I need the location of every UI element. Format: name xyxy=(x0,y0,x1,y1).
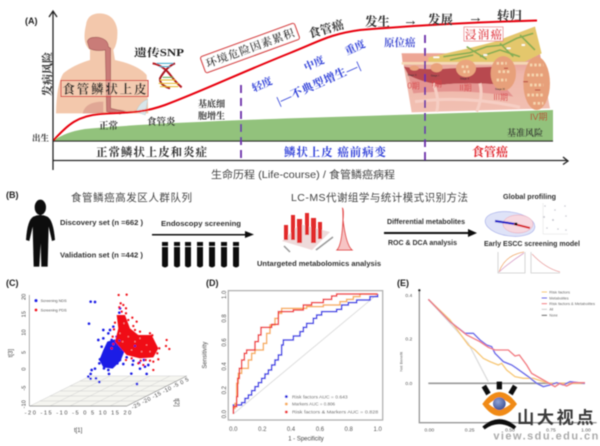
heading: high-incidence cohort: 食管鳞癌高发区人群队列 xyxy=(71,191,192,204)
life-course axis arrow xyxy=(53,157,568,164)
tiny stage captions: Stage II xyxy=(460,76,469,80)
curve: risk factors xyxy=(428,299,585,383)
x axis ticks: 0.0 xyxy=(229,427,238,433)
global profiling label: Global profiling xyxy=(503,192,556,201)
x axis ticks: 0.8 xyxy=(344,427,353,433)
arrow: analysis xyxy=(384,229,477,237)
x axis ticks: 0.25 xyxy=(465,427,475,433)
discovery set label: Discovery set (n =662 ) xyxy=(60,218,144,227)
band: normal squamous epithelium and inflammation: 正常鳞状上皮和炎症 xyxy=(96,145,208,159)
y axis ticks: 15 xyxy=(21,311,27,317)
panel C: 3D scatter plot xyxy=(6,278,190,434)
chart: small scatter grid xyxy=(543,203,568,234)
header: esophageal cancer: 食管癌 xyxy=(307,17,345,41)
stage label: basal cell hyperplasia: 基底细 xyxy=(198,98,225,109)
legend: Screening PDS xyxy=(41,308,67,312)
x axis ticks: 0.4 xyxy=(287,427,296,433)
tiny stage captions: Stage 0 xyxy=(407,73,417,77)
header: occurrence development outcome xyxy=(365,8,522,29)
chart: 3D metabolomics peaks xyxy=(282,208,352,252)
panel B label: (B) xyxy=(6,190,18,200)
y axis ticks: 0 xyxy=(21,368,27,371)
genetic SNP label: 遗传SNP xyxy=(134,46,185,59)
stage label: basal cell hyperplasia xyxy=(198,98,225,121)
illustration: esophageal tumour tissue stages xyxy=(402,27,550,112)
label box: esophageal squamous epithelium: 食管鳞状上皮 xyxy=(62,82,147,96)
ROC curve: markers xyxy=(233,294,378,414)
y axis ticks: -10 xyxy=(21,400,27,408)
logo: lower black arc xyxy=(482,419,516,429)
band: precancerous lesions: 鳞状上皮 癌前病变 xyxy=(284,145,386,159)
curve: risk factors and metabolites xyxy=(428,299,585,387)
y axis arrow xyxy=(49,11,57,170)
icon: DNA helix xyxy=(153,63,182,88)
header: occurrence development outcome: 发生 xyxy=(365,14,391,29)
y axis ticks: 10 xyxy=(21,329,27,336)
endoscopy screening label: Endoscopy screening xyxy=(161,219,241,228)
icon: person silhouette xyxy=(26,200,55,267)
early ESCC model caption: Early ESCC screening model xyxy=(484,239,580,248)
legend: None xyxy=(549,314,558,318)
y axis ticks xyxy=(405,293,412,387)
legend xyxy=(285,394,379,415)
x axis ticks: 1.00 xyxy=(581,427,591,433)
green baseline risk area xyxy=(53,110,553,141)
legend: All xyxy=(549,308,553,312)
label: invasive cancer: 浸润癌 xyxy=(465,28,502,42)
panel E: decision curves xyxy=(397,278,597,440)
label: atypical hyperplasia: |—不典型增生—| xyxy=(275,58,362,108)
3D floor grid xyxy=(30,376,187,406)
validation set label: Validation set (n =442 ) xyxy=(60,250,144,260)
y axis ticks: 0.0 xyxy=(405,381,412,387)
y axis title: t[3] xyxy=(8,349,14,357)
x axis ticks: 0.50 xyxy=(505,427,515,433)
heading: LC-MS metabolomics: LC-MS代谢组学与统计模式识别方法 xyxy=(291,191,468,204)
watermark name: 山大视点 xyxy=(517,407,594,427)
ROC curve: risk factors and markers xyxy=(233,294,378,414)
depth axis ticks: -25 -20 -15 -10 -5 0 5 xyxy=(131,377,190,411)
header: occurrence development outcome: → xyxy=(403,12,418,29)
curve: metabolites xyxy=(428,299,585,387)
differential metabolites label: Differential metabolites xyxy=(387,217,465,226)
scatter: blue screening NDD points xyxy=(88,302,148,384)
baseline axis xyxy=(53,140,553,142)
panel A label: (A) xyxy=(25,16,38,26)
x axis ticks xyxy=(229,427,382,433)
purple dashed divider: left xyxy=(240,85,242,161)
x axis ticks: 0.00 xyxy=(424,427,434,433)
label: baseline risk: 基准风险 xyxy=(507,127,543,138)
y axis ticks: -5 xyxy=(21,386,27,391)
plot frame xyxy=(228,291,383,420)
y axis ticks: 0.8 xyxy=(222,314,228,323)
legend: Screening NDS xyxy=(41,299,67,303)
x axis title smear xyxy=(495,436,597,444)
depth axis title: t[2] xyxy=(173,398,179,407)
panel C label: (C) xyxy=(6,278,18,288)
legend: Risk factors xyxy=(549,290,570,294)
axes xyxy=(29,295,187,406)
x axis ticks: 1.0 xyxy=(373,427,382,433)
band: esophageal cancer: 食管癌 xyxy=(472,144,508,159)
y axis title: Sensitivity xyxy=(202,342,208,369)
header: occurrence development outcome: 转归 xyxy=(497,8,522,23)
tiny stage captions xyxy=(407,73,505,91)
label box: environmental risk factors: 环境危险因素累积 xyxy=(204,25,297,70)
birth label: 出生 xyxy=(32,133,50,143)
chart: PCA ellipse plot xyxy=(484,209,536,239)
tiny stage captions: Stage I xyxy=(431,74,439,78)
y axis ticks: 0.2 xyxy=(222,385,228,394)
panel D: ROC curves xyxy=(202,278,383,443)
watermark logo: 山大视点 xyxy=(482,382,599,442)
y axis ticks: 0.4 xyxy=(405,293,412,299)
purple dashed divider: right xyxy=(424,35,426,161)
ROC curve: risk factors xyxy=(233,294,378,414)
y axis ticks xyxy=(21,294,27,408)
stage labels on tissue: II期 xyxy=(459,83,472,92)
curve: none reference xyxy=(428,381,585,386)
stage label: esophagitis: 食管炎 xyxy=(147,116,177,128)
axes xyxy=(419,290,597,423)
legend: Markers AUC = 0.806 xyxy=(292,402,336,407)
y axis ticks: 0.4 xyxy=(222,362,228,371)
y axis ticks: 0.2 xyxy=(405,336,412,342)
x axis title: t[1] xyxy=(74,428,83,434)
panel E label: (E) xyxy=(397,278,409,288)
x axis ticks: -20 -15 -10 -5 0 5 10 15 20 xyxy=(25,411,131,417)
y axis ticks: 5 xyxy=(21,351,27,354)
red risk curve xyxy=(53,20,537,141)
legend xyxy=(34,299,67,312)
chart: small ROC and DCA thumbnails xyxy=(498,252,560,273)
x axis ticks xyxy=(424,427,591,433)
legend: Risk factors AUC = 0.643 xyxy=(292,394,348,399)
y axis ticks xyxy=(222,290,228,418)
stage labels on tissue: 0期 xyxy=(407,81,420,90)
header: occurrence development outcome: → xyxy=(468,9,483,26)
x axis title: 生命历程 (Life-course) / 食管鳞癌病程 xyxy=(211,168,396,181)
header: occurrence development outcome: 发展 xyxy=(428,12,454,27)
x axis ticks: 0.2 xyxy=(258,427,267,433)
logo: eye pupil xyxy=(493,397,506,410)
y axis ticks: 20 xyxy=(21,294,27,300)
watermark URL: view.sdu.edu.cn xyxy=(493,430,599,442)
arrow: endoscopy xyxy=(152,231,254,238)
scatter: red screening PDS points xyxy=(112,295,169,370)
curve: treat all xyxy=(428,299,488,382)
y axis title: 发病风险 xyxy=(40,52,54,96)
y axis ticks: 1.0 xyxy=(222,290,228,299)
x axis title: 1 - Specificity xyxy=(288,437,324,443)
stage labels on tissue: I期 xyxy=(432,80,442,89)
stage label: carcinoma in situ: 原位癌 xyxy=(384,36,416,49)
stage label: basal cell hyperplasia: 胞增生 xyxy=(198,110,225,121)
illustration: human upper body with esophagus xyxy=(56,13,148,115)
diagonal reference xyxy=(233,294,378,414)
ROC DCA label: ROC & DCA analysis xyxy=(388,238,457,247)
stage label: severe: 重度 xyxy=(343,37,368,58)
icon: sample tubes xyxy=(162,242,239,268)
y axis title: Net Benefit xyxy=(399,351,404,372)
legend xyxy=(542,290,595,318)
label: stage IV: IV期 xyxy=(530,112,548,122)
stage label: moderate: 中度 xyxy=(302,53,327,74)
tiny stage captions: Stage III xyxy=(495,87,505,91)
panel B: study workflow xyxy=(6,190,580,273)
logo: orange eye xyxy=(482,392,517,416)
stage label: normal: 正常 xyxy=(99,120,119,132)
legend: Metabolites xyxy=(549,296,569,300)
stage labels on tissue: III期 xyxy=(493,93,508,102)
panel D label: (D) xyxy=(206,278,218,288)
panel A: life-course risk of esophageal cancer xyxy=(25,8,568,181)
top axis tick xyxy=(418,289,420,291)
stage labels on tissue xyxy=(407,80,508,102)
untargeted metabolomics caption: Untargeted metabolomics analysis xyxy=(257,259,381,268)
y axis ticks: 0.6 xyxy=(222,338,228,347)
x axis ticks: 0.6 xyxy=(316,427,325,433)
x axis ticks: 0.75 xyxy=(546,427,556,433)
logo: eye rays xyxy=(482,382,517,395)
y axis ticks: 0.0 xyxy=(222,409,228,418)
stage label: mild: 轻度 xyxy=(250,74,275,95)
legend: Risk factors & Markers AUC = 0.828 xyxy=(292,410,379,415)
legend: Risk factors & Metabolites xyxy=(549,302,595,306)
